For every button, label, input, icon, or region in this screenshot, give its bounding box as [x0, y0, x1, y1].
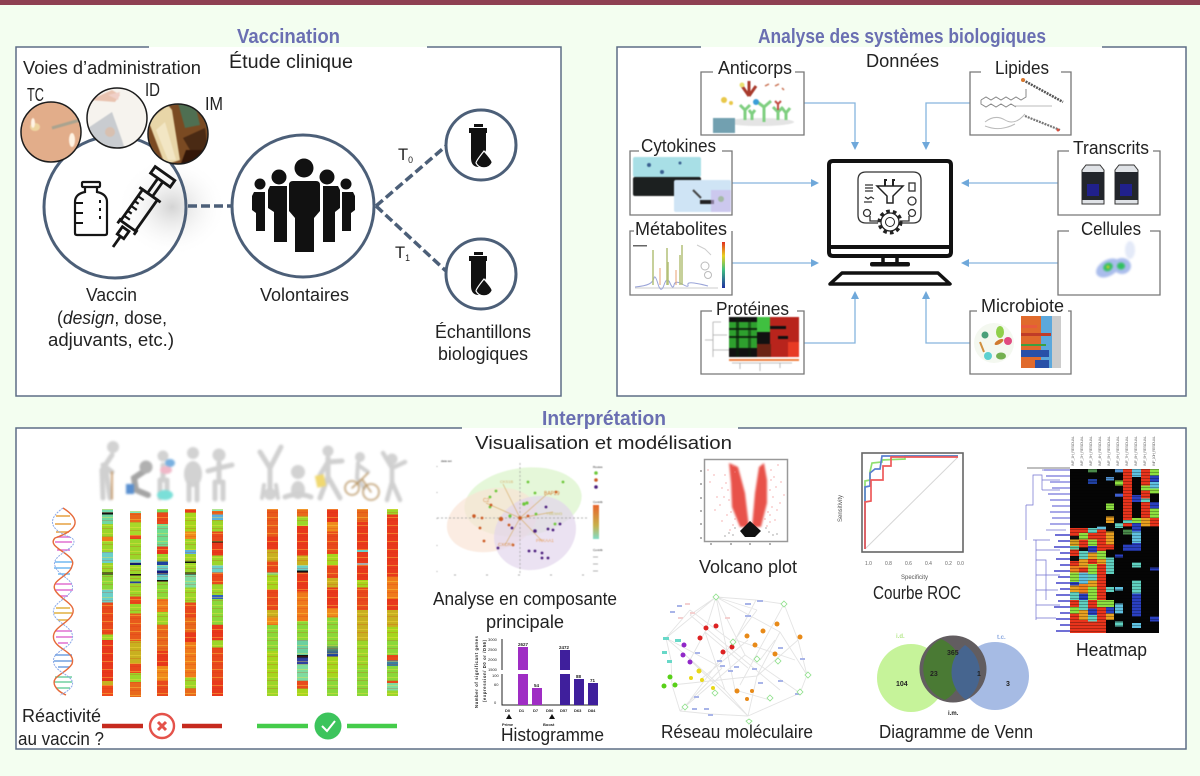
subheading: Étude clinique: Étude clinique — [229, 52, 353, 73]
image: spectrum — [633, 245, 718, 289]
PCA plot: CKS1B — [500, 479, 513, 484]
heading: Vaccination: Vaccination — [237, 26, 340, 48]
histogram: 2627 — [518, 642, 529, 647]
icon: DNA double helix — [52, 508, 75, 695]
photo: TC — [21, 102, 81, 162]
heatmap column 2 — [1079, 469, 1088, 633]
ROC curve — [838, 453, 964, 581]
figures: non-reactive group — [102, 441, 232, 500]
box: Lipides — [970, 58, 1071, 135]
label: Heatmap: Heatmap — [1076, 640, 1147, 660]
label: Vaccin: Vaccin — [86, 285, 137, 305]
label: T1: 1 — [405, 253, 410, 263]
histogram: Boost — [543, 722, 555, 727]
subheading: Visualisation et modélisation: Visualisation et modélisation — [475, 433, 732, 453]
stripe bar 10 — [387, 509, 398, 696]
stripe bar 3 — [157, 509, 168, 696]
box: Cytokines — [630, 136, 732, 215]
histogram: (expression/ D0 or /D56) — [482, 639, 487, 702]
circle: volontaires — [232, 135, 374, 277]
histogram: 2000 — [488, 657, 498, 662]
label: Lipides: Lipides — [995, 58, 1049, 78]
image: microarray chips — [1082, 165, 1138, 204]
stripe bar 5 — [212, 509, 222, 696]
ROC curve: Sensitivity — [838, 495, 844, 522]
heatmap column labels: IMF_10H_RESIDUAL — [1151, 435, 1156, 466]
heatmap column labels: IMF_9H_RESIDUAL — [1142, 435, 1147, 466]
volcano plot — [700, 460, 788, 545]
label: principale: principale — [486, 612, 564, 632]
heatmap column labels: IMF_7H_RESIDUAL — [1124, 435, 1129, 466]
ROC curve: 0.2 — [945, 561, 952, 567]
PCA plot: Contrib — [593, 548, 603, 552]
icon: group of people — [252, 158, 355, 252]
icon: check — [314, 712, 342, 740]
heatmap column labels: IMF_4H_RESIDUAL — [1097, 435, 1102, 466]
ROC curve: 0.8 — [885, 561, 892, 567]
label: Transcrits: Transcrits — [1073, 138, 1149, 158]
circle: sample T0 — [446, 110, 516, 180]
box: Anticorps — [701, 58, 804, 135]
Venn diagram: 3 — [1006, 681, 1010, 688]
label: T0: T — [398, 145, 408, 164]
PCA plot: Contrib — [593, 500, 603, 504]
stripe bar 7 — [297, 509, 308, 696]
circle: vaccin — [44, 136, 186, 278]
label: design, dose: (design, dose, — [57, 308, 167, 328]
histogram: 54 — [534, 683, 540, 688]
histogram: D57 — [560, 708, 568, 713]
heatmap — [1070, 469, 1159, 633]
label: Microbiote: Microbiote — [981, 296, 1064, 316]
heatmap column 10 — [1150, 469, 1159, 633]
ROC curve: 0.4 — [925, 561, 932, 567]
shadow behind vaccine circle — [117, 157, 227, 257]
Venn diagram: 104 — [896, 681, 908, 688]
heatmap column labels: IMF_8H_RESIDUAL — [1133, 435, 1138, 466]
box: Transcrits — [1058, 138, 1160, 215]
PCA plot: Routes — [593, 465, 603, 469]
histogram: D1 — [519, 708, 525, 713]
label: Réseau moléculaire: Réseau moléculaire — [661, 722, 813, 742]
Venn diagram: 1 — [977, 671, 981, 678]
histogram: D63 — [574, 708, 582, 713]
icon: flasks — [885, 180, 895, 186]
label: au vaccin ?: au vaccin ? — [18, 729, 104, 749]
image: lipid molecules — [981, 78, 1063, 132]
histogram: D7 — [533, 708, 539, 713]
heatmap column 9 — [1141, 469, 1150, 633]
arrows — [732, 103, 1058, 343]
histogram: Prime — [502, 722, 514, 727]
PCA plot: BAP29 — [544, 491, 560, 497]
stripe bar 9 — [357, 509, 368, 696]
heatmap column 7 — [1123, 469, 1132, 633]
icon: cross — [150, 714, 174, 738]
label: Réactivité: Réactivité — [22, 706, 101, 726]
stripe bar 2 — [130, 511, 140, 697]
label: Cytokines: Cytokines — [641, 136, 716, 156]
positive reaction line — [257, 724, 397, 728]
label: biologiques: biologiques — [438, 344, 528, 364]
PCA plot: PRKAA1 — [536, 538, 554, 543]
heatmap column 6 — [1114, 469, 1123, 633]
molecular network — [662, 594, 811, 724]
label: Voies d'administration: Voies d’administration — [23, 58, 201, 78]
histogram: 100 — [492, 673, 499, 678]
histogram — [474, 635, 598, 727]
histogram: 3000 — [488, 637, 498, 642]
heatmap dendrogram — [1026, 468, 1070, 631]
ROC curve: 1.0 — [865, 561, 872, 567]
PCA plot: data set — [441, 459, 452, 463]
panel: Interprétation — [15, 427, 1187, 750]
label: Volontaires: Volontaires — [260, 285, 349, 305]
box: Microbiote — [970, 296, 1071, 374]
icon: computer with analysis pipeline — [829, 161, 951, 284]
circle: sample T1 — [446, 239, 516, 309]
Venn diagram: 23 — [930, 671, 938, 678]
stripe bar 1 — [102, 509, 112, 696]
dashed link vaccin to volontaires — [188, 204, 233, 208]
label: Protéines: Protéines — [716, 299, 789, 319]
Venn diagram: i.d. — [896, 634, 905, 640]
label: Échantillons: Échantillons — [435, 322, 531, 342]
stripe bar 4 — [185, 509, 196, 696]
label: Courbe ROC: Courbe ROC — [873, 583, 961, 603]
heatmap column labels: IMF_6H_RESIDUAL — [1115, 435, 1120, 466]
Venn diagram — [877, 634, 1029, 717]
PCA plot — [437, 459, 603, 583]
histogram: 1500 — [488, 667, 498, 672]
icon: gear — [880, 212, 900, 232]
image: microbes — [974, 316, 1061, 368]
heading: Analyse des systèmes biologiques: Analyse des systèmes biologiques — [758, 26, 1046, 48]
histogram: D84 — [588, 708, 596, 713]
heatmap column labels: IMF_3H_RESIDUAL — [1088, 435, 1093, 466]
label: Histogramme: Histogramme — [501, 725, 604, 745]
box: Cellules — [1058, 219, 1160, 295]
heatmap column 8 — [1132, 469, 1141, 633]
Venn diagram: 365 — [947, 650, 959, 657]
Venn diagram: t.c. — [997, 635, 1006, 641]
icon: pipeline frame — [858, 172, 921, 223]
colour bar — [722, 242, 725, 288]
photo ring: TC — [21, 102, 81, 162]
icon: vial — [75, 182, 107, 235]
heatmap column labels: IMF_1H_RESIDUAL — [1070, 435, 1075, 466]
PCA plot: C2 — [483, 498, 490, 504]
histogram: 88 — [576, 674, 582, 679]
label: ID: ID — [145, 80, 160, 100]
histogram: D0 — [505, 708, 511, 713]
histogram: Number of significant genes — [474, 635, 479, 708]
PCA plot: CXCR4 — [498, 542, 514, 547]
image: antibodies — [713, 81, 794, 133]
figures: reactive group — [260, 446, 405, 500]
label: Volcano plot: Volcano plot — [699, 557, 797, 577]
negative reaction line — [102, 724, 222, 728]
histogram: 2500 — [488, 647, 498, 652]
image: protein heatmap — [705, 317, 799, 371]
label: adjuvants: adjuvants, etc.) — [48, 330, 174, 350]
photo ring: IM — [148, 104, 208, 164]
label: T1: T — [395, 243, 405, 262]
heatmap column 1 — [1070, 469, 1079, 633]
histogram: 60 — [494, 682, 499, 687]
image: cytokines — [633, 157, 731, 212]
photo ring: ID — [87, 88, 147, 148]
ROC curve: 0.0 — [957, 561, 964, 567]
heatmap column labels — [1070, 435, 1156, 466]
image: flow cytometry — [1093, 241, 1135, 281]
icon: funnel — [877, 186, 903, 203]
PCA plot: TMEM45 — [546, 511, 563, 516]
top stripe — [0, 0, 1200, 5]
icon: tube T1 — [469, 252, 492, 296]
stripe bar 6 — [267, 509, 278, 696]
heatmap column labels: IMF_5H_RESIDUAL — [1106, 435, 1111, 466]
icon: tube T0 — [469, 124, 492, 168]
label: PCA: Analyse en composante — [433, 589, 617, 609]
histogram: D56 — [546, 708, 554, 713]
box: Métabolites — [630, 219, 732, 295]
label: Anticorps: Anticorps — [718, 58, 792, 78]
icon: small indicators — [864, 183, 916, 221]
photo: ID — [87, 88, 147, 150]
ROC curve: 0.6 — [905, 561, 912, 567]
histogram: 2472 — [559, 645, 570, 650]
subheading: Données: Données — [866, 51, 939, 71]
heatmap column 5 — [1106, 469, 1114, 633]
stripe bar 8 — [327, 509, 338, 696]
panel: Vaccination — [15, 46, 562, 397]
label: Diagramme de Venn: Diagramme de Venn — [879, 722, 1033, 742]
label: T0: 0 — [408, 155, 413, 165]
heatmap column 4 — [1097, 469, 1106, 633]
label: Métabolites: Métabolites — [635, 219, 727, 239]
label: IM: IM — [205, 94, 223, 114]
label: Cellules: Cellules — [1081, 219, 1141, 239]
heading: Interprétation: Interprétation — [542, 408, 666, 430]
arrowheads — [811, 142, 969, 299]
heatmap column labels: IMF_2H_RESIDUAL — [1079, 435, 1084, 466]
heatmap column 3 — [1088, 469, 1097, 633]
histogram: 0 — [494, 700, 497, 705]
ROC curve: Specificity — [901, 575, 928, 581]
photo: IM — [148, 103, 208, 166]
icon: syringe — [102, 166, 176, 255]
histogram: 71 — [590, 678, 596, 683]
dashed links to samples — [376, 146, 446, 271]
panel: Analyse des systèmes biologiques — [616, 46, 1187, 397]
label: TC: TC — [27, 85, 44, 105]
Venn diagram: i.m. — [948, 711, 959, 717]
box: Protéines — [701, 299, 804, 374]
